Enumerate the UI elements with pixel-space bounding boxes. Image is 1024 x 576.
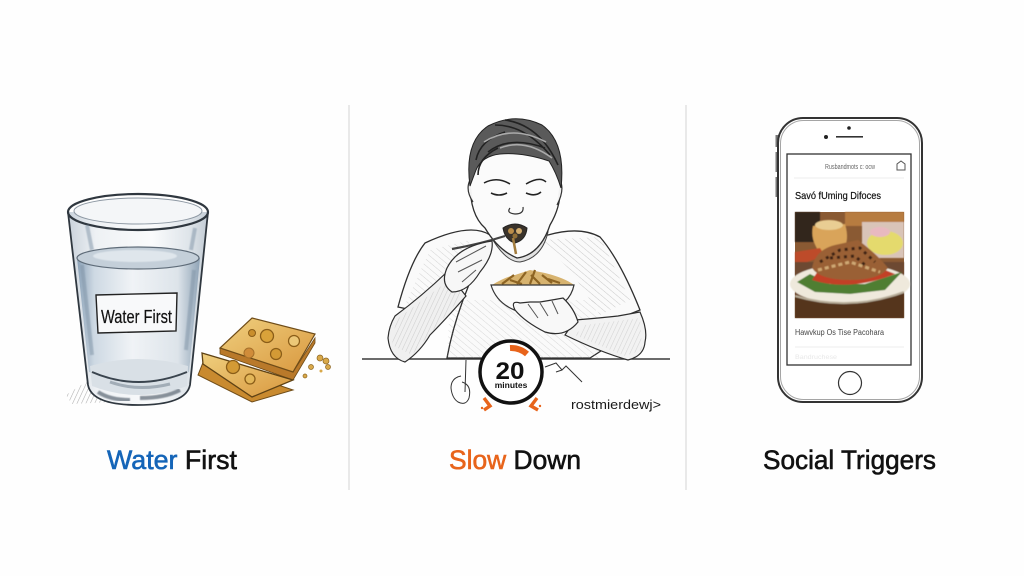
glass label: Water First	[101, 307, 172, 327]
hair	[469, 119, 562, 188]
phone screen: Hawvkup Os Tise Pacohara	[795, 328, 884, 337]
heading: water first: Water First	[107, 445, 237, 475]
supporting hand	[513, 298, 578, 334]
fork and hand	[452, 236, 505, 249]
icon: sketch doodles	[451, 360, 582, 403]
phone screen	[787, 154, 911, 365]
icon: 20 minute timer	[480, 341, 542, 410]
head	[470, 135, 560, 258]
food photo	[790, 212, 910, 318]
icon: crackers	[198, 318, 330, 402]
icon: 20 minute timer: 20	[496, 358, 524, 385]
mouth with food	[503, 224, 527, 243]
panel: slow down	[362, 119, 670, 475]
phone screen: Savó fUming Difoces	[795, 190, 881, 202]
garbled caption: rostmierdewj>	[571, 397, 661, 412]
left forearm	[388, 272, 466, 362]
icon: person eating	[362, 119, 670, 362]
neck	[490, 215, 548, 262]
panel: water first	[66, 194, 330, 475]
icon: 20 minute timer: minutes	[495, 380, 528, 390]
phone screen: Rusbandmots c: ocw	[825, 164, 876, 171]
icon: smartphone	[776, 118, 922, 402]
home button	[838, 372, 862, 394]
bowl with food	[492, 270, 574, 285]
glass label	[96, 293, 177, 333]
panel: social triggers	[763, 118, 936, 475]
eyes, brows, nose	[484, 179, 546, 184]
heading: slow down: Slow Down	[449, 445, 581, 475]
icon: glass of water	[66, 194, 208, 405]
shirt	[398, 230, 640, 358]
right forearm	[565, 312, 646, 360]
heading: social triggers: Social Triggers	[763, 445, 936, 475]
phone screen: Bandruchese	[795, 355, 838, 361]
